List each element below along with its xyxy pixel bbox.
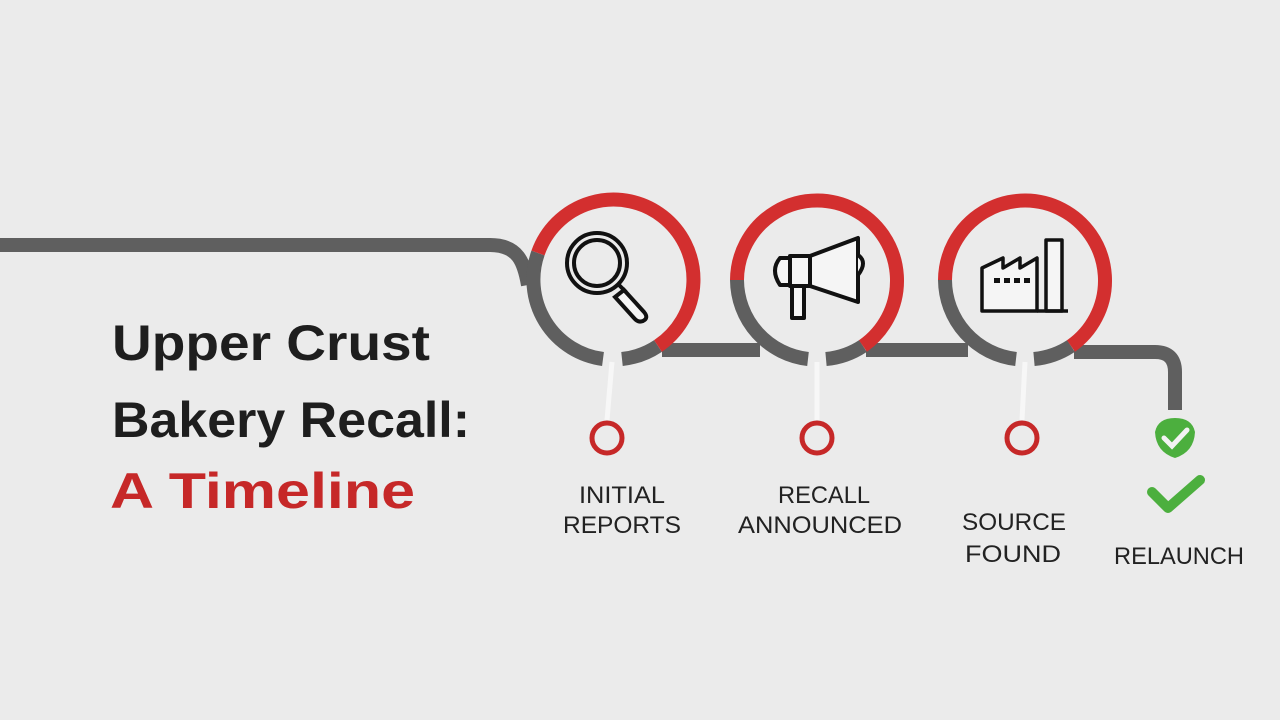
labels: ANNOUNCED	[738, 512, 902, 539]
labels: FOUND	[965, 541, 1061, 568]
labels: SOURCE	[962, 509, 1066, 536]
icon: factory	[982, 240, 1068, 311]
stems	[607, 362, 1025, 420]
timeline track	[0, 245, 1175, 410]
title	[110, 315, 470, 519]
milestone markers	[592, 423, 1037, 453]
labels: RECALL	[778, 482, 870, 509]
node 2: recall announced	[737, 201, 897, 359]
title: Upper Crust	[112, 315, 430, 371]
icon: large check	[1152, 480, 1200, 508]
icon: magnifier	[567, 233, 646, 322]
node 3: source found	[945, 201, 1105, 359]
icon: megaphone	[775, 238, 863, 318]
title: A Timeline	[110, 463, 415, 519]
title: Bakery Recall:	[112, 392, 470, 448]
labels: INITIAL	[579, 482, 665, 509]
labels	[563, 482, 1244, 570]
node 1: initial reports	[533, 200, 693, 359]
icon: green check badge	[1155, 418, 1195, 458]
labels: RELAUNCH	[1114, 543, 1244, 570]
labels: REPORTS	[563, 512, 681, 539]
